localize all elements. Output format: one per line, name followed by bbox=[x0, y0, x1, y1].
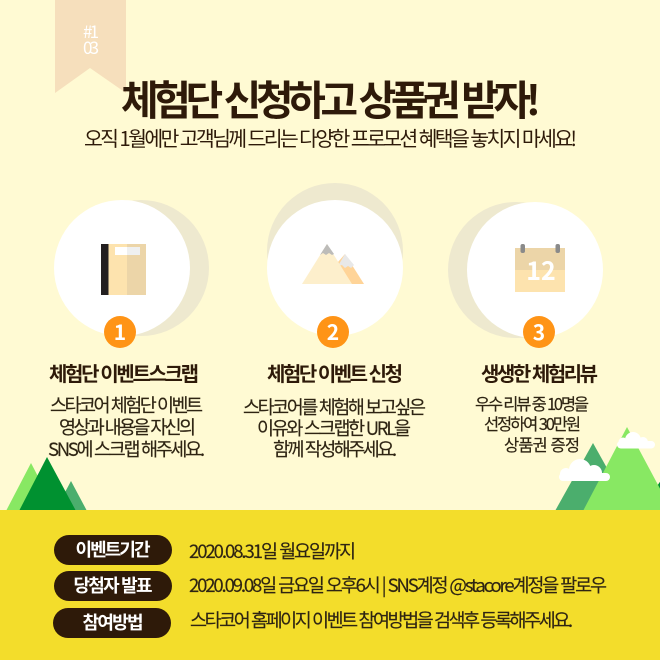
text: step 3 description: 상품권 증정 bbox=[504, 432, 580, 456]
right mountains bbox=[555, 427, 660, 511]
icon: calendar bbox=[515, 244, 565, 292]
heading: step 2: 체험단 이벤트 신청 bbox=[267, 358, 403, 387]
panel: step 1 bbox=[48, 200, 209, 462]
text: step 1 description bbox=[48, 392, 205, 462]
heading: step 3: 생생한 체험리뷰 bbox=[481, 358, 598, 387]
text: step 1 description: 스타코어 체험단 이벤트 bbox=[50, 392, 203, 418]
subtitle: 오직 1월에만 고객님께 드리는 다양한 프로모션 혜택을 놓치지 마세요! bbox=[84, 122, 577, 152]
row: winner announcement: 2020.09.08일 금요일 오후6시 | SNS계정 @stacore계정을 팔로우 bbox=[189, 572, 607, 598]
circle: step 2 bbox=[267, 183, 403, 336]
title: 체험단 신청하고 상품권 받자! bbox=[121, 67, 541, 127]
text: step 3 description: 우수 리뷰 중 10명을 bbox=[475, 391, 589, 415]
badge: number 3: 3 bbox=[533, 317, 545, 347]
row: event period bbox=[54, 535, 356, 565]
ribbon badge: 03 bbox=[83, 34, 99, 59]
text: step 3 description: 선정하여 30만원 bbox=[484, 411, 581, 435]
text: step 1 description: SNS에 스크랩 해주세요. bbox=[48, 436, 205, 462]
heading: step 1: 체험단 이벤트스크랩 bbox=[49, 358, 199, 387]
panel: event details bbox=[0, 510, 660, 660]
badge: number 2: 2 bbox=[327, 317, 339, 347]
cloud: small bbox=[617, 432, 655, 448]
ribbon badge bbox=[55, 0, 126, 93]
text: step 2 description bbox=[243, 394, 426, 462]
icon: calendar: 12 bbox=[526, 252, 556, 288]
row: how to enter: 참여방법 bbox=[82, 609, 144, 635]
icon: mountains bbox=[302, 244, 364, 284]
badge: number 1: 1 bbox=[114, 317, 126, 347]
row: event period: 이벤트기간 bbox=[76, 536, 151, 562]
row: how to enter: 스타코어 홈페이지 이벤트 참여방법을 검색후 등록해주세요. bbox=[190, 607, 573, 633]
row: how to enter bbox=[53, 607, 573, 638]
ribbon badge: #1 bbox=[83, 18, 99, 43]
panel: step 3 bbox=[448, 202, 603, 456]
left mountains bbox=[6, 457, 87, 511]
badge: number 2 bbox=[317, 316, 349, 348]
text: step 3 description bbox=[475, 391, 589, 456]
text: step 2 description: 이유와 스크랩한 URL을 bbox=[257, 415, 411, 441]
panel: step 2 bbox=[243, 183, 426, 462]
circle: step 3 bbox=[448, 202, 603, 338]
row: winner announcement: 당첨자 발표 bbox=[74, 572, 152, 598]
text: step 2 description: 스타코어를 체험해 보고싶은 bbox=[243, 394, 426, 420]
row: winner announcement bbox=[54, 571, 607, 601]
text: step 1 description: 영상과 내용을 자신의 bbox=[59, 414, 196, 440]
badge: number 1 bbox=[104, 316, 136, 348]
badge: number 3 bbox=[523, 316, 555, 348]
cloud: large bbox=[559, 459, 610, 481]
row: event period: 2020.08.31일 월요일까지 bbox=[189, 538, 356, 564]
icon: scrapbook bbox=[101, 244, 146, 295]
text: step 2 description: 함께 작성해주세요. bbox=[273, 436, 397, 462]
circle: step 1 bbox=[54, 200, 209, 336]
